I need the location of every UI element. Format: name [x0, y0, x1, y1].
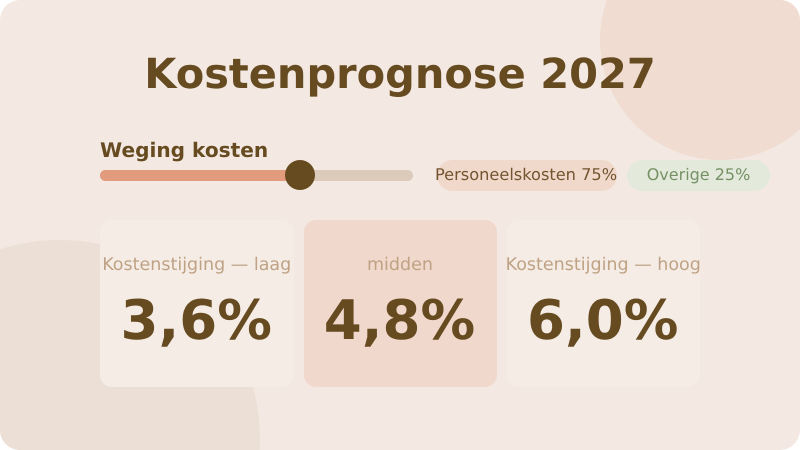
pill: overige: Overige 25%: [647, 165, 750, 184]
pill: overige: [627, 160, 770, 191]
pill: personeelskosten: [437, 160, 617, 191]
card: laag: [100, 220, 294, 386]
card: midden: [304, 220, 496, 386]
title: Kostenprognose 2027: [144, 49, 656, 98]
slider: [100, 160, 413, 190]
card value: 4,8%: [324, 288, 475, 352]
card label: midden: [367, 255, 433, 275]
slider label: Weging kosten: [100, 138, 268, 162]
slider track: [100, 170, 413, 181]
slider handle: [285, 160, 315, 190]
card: hoog: [506, 220, 700, 386]
card value: 3,6%: [121, 288, 272, 352]
card label: Kostenstijging — laag: [102, 255, 291, 275]
pill: personeelskosten: Personeelskosten 75%: [435, 165, 617, 184]
card label: Kostenstijging — hoog: [506, 255, 701, 275]
card value: 6,0%: [527, 288, 678, 352]
slider fill: [100, 170, 300, 181]
